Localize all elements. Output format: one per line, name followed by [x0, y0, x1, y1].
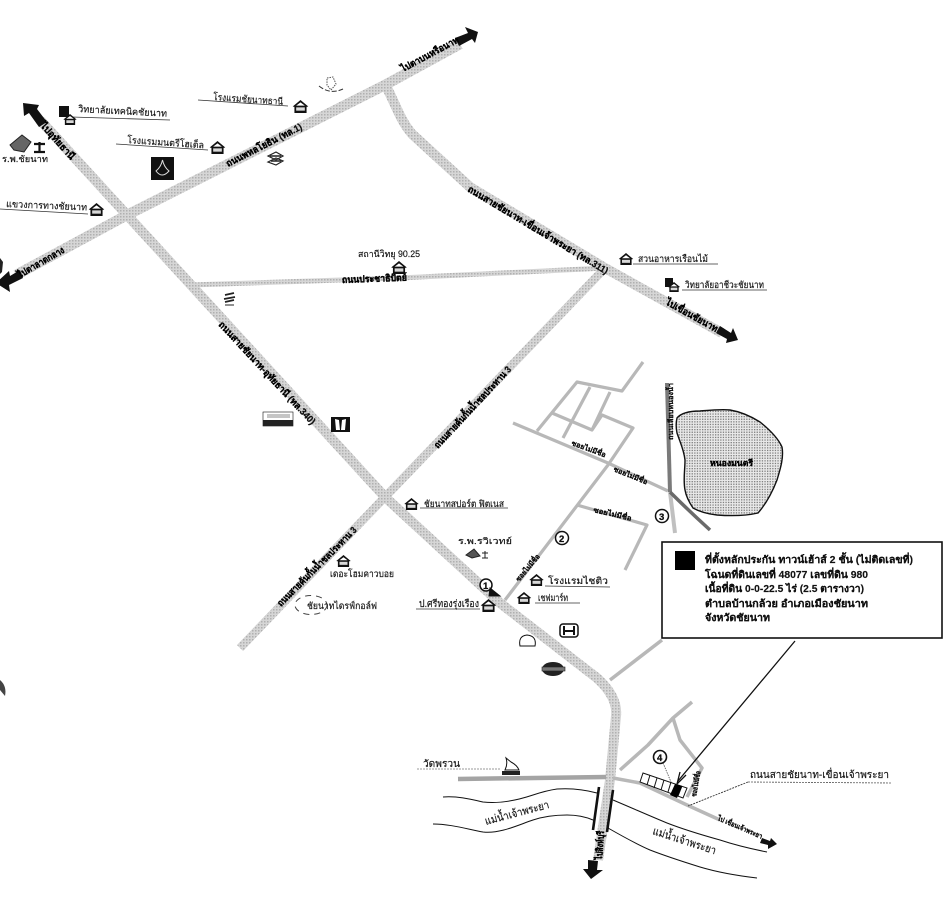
- marker 3: [656, 510, 668, 523]
- label: Ban Phot: ไปตาบนหรือนาท: [398, 34, 461, 75]
- label: lake road: ถนนเลียบหนองน้ำ: [664, 383, 675, 440]
- road: lakeside: [667, 383, 670, 492]
- river bank north: [443, 789, 767, 852]
- site marker: [670, 784, 682, 798]
- river: [433, 787, 767, 878]
- arrow: S: [583, 860, 603, 879]
- landmark: hotel: [116, 133, 225, 154]
- logo: hotel: [151, 157, 174, 180]
- road: highway 1: [16, 44, 460, 275]
- label: lane 2: ซอยไม่มีชื่อ: [612, 464, 649, 486]
- label: south: ไปสิงห์บุรี: [593, 830, 607, 861]
- pond: [676, 410, 783, 516]
- legend square: [675, 551, 695, 570]
- landmark: The Home Cowboy: [330, 555, 394, 580]
- edge mark: [0, 680, 5, 696]
- landmark: Wat Phrawan: [417, 758, 520, 775]
- label: lane 1: ซอยไม่มีชื่อ: [570, 437, 608, 459]
- landmark: Rawiwet hospital: [458, 536, 512, 558]
- logo: Suzuki: [224, 293, 235, 305]
- landmark: technical college: วิทยาลัยเทคนิคชัยนาท: [77, 104, 167, 120]
- logo: Honda: [560, 624, 578, 637]
- callout box: [662, 542, 942, 638]
- marker 1: 1: [483, 581, 489, 592]
- label: 340: ถนนสายชัยนาท-อุทัยธานี (ทล.340): [216, 319, 318, 427]
- label: Phahon Yothin: ถนนพหลโยธิน (ทล.1): [224, 121, 304, 170]
- landmark: technical college: [59, 104, 170, 125]
- label: Irrigation 3 upper: ถนนสายคันกั้นน้ำชลประทาน 3: [430, 363, 514, 451]
- label: 311: ถนนสายชัยนาท-เขื่อนเจ้าพระยา (ทล.311): [465, 182, 612, 277]
- callout text: จังหวัดชัยนาท: [705, 612, 770, 624]
- callout line: river road label: [688, 767, 892, 806]
- label: Uthai: ไปอุทัยธานี: [37, 119, 78, 163]
- label: Irrigation 3 lower: ถนนสายคันกั้นน้ำชลประทาน 3: [273, 523, 359, 609]
- landmark: chef mart: [517, 592, 580, 604]
- road: 311 Chainat-Chao Phraya dam: [386, 86, 722, 333]
- landmark: Chainat Thani hotel: [198, 91, 308, 113]
- landmark: vocational college: วิทยาลัยอาชีวะชัยนาท: [684, 279, 764, 291]
- landmark: restaurant: สวนอาหารเรือนไม้: [638, 253, 708, 265]
- marker 1: [480, 579, 500, 596]
- callout text: โฉนดที่ดินเลขที่ 48077 เลขที่ดิน 980: [704, 567, 868, 581]
- landmark: Wat Phrawan: วัดพรวน: [423, 759, 460, 770]
- road: Chaloem Phrakiat: [240, 268, 605, 648]
- local lanes: [505, 362, 668, 600]
- landmark: radio station: สถานีวิทยุ 90.25: [358, 249, 420, 260]
- callout text: เนื้อที่ดิน 0-0-22.5 ไร่ (2.5 ตารางวา): [705, 581, 864, 595]
- landmark: radio station: [358, 249, 420, 274]
- label: Ban Phot 2: ไปเขื่อนชัยนาท: [663, 294, 721, 335]
- landmark: chef mart: เชฟมาร์ท: [538, 592, 568, 604]
- leader arrow: [677, 641, 795, 784]
- logo: Lotus: [263, 412, 293, 426]
- landmark: sport fitness: ชัยนาทสปอร์ต ฟิตเนส: [424, 498, 504, 510]
- callout line: river road label: ถนนสายชัยนาท-เขื่อนเจ้าพระยา: [750, 767, 889, 781]
- callout text: ตำบลบ้านกล้วย อำเภอเมืองชัยนาท: [705, 598, 868, 610]
- numbered marker 4: [654, 750, 671, 782]
- river label west: แม่น้ำเจ้าพระยา: [483, 796, 551, 828]
- landmark: golf: [295, 596, 377, 614]
- arrow: far east: [760, 838, 777, 849]
- bridge: [593, 787, 613, 832]
- logo: Isuzu: [331, 417, 350, 432]
- marker 3: 3: [659, 512, 664, 523]
- label: Tak: ไปตาลาดกลาง: [15, 244, 67, 281]
- landmark: The Home Cowboy: เดอะโฮมคาวบอย: [330, 568, 394, 580]
- river label east: แม่น้ำเจ้าพระยา: [651, 823, 718, 857]
- road labels: [15, 34, 764, 861]
- river bank south: [433, 815, 757, 878]
- road: Prachathipat: [190, 268, 605, 285]
- pond label: หนองมนตรี: [710, 458, 753, 468]
- road: lane to river road: [610, 640, 702, 797]
- logo: Shell: [520, 635, 535, 646]
- marker 2: 2: [559, 534, 564, 545]
- arrow: E: [716, 326, 738, 343]
- arrow: NE: [455, 27, 478, 46]
- label: lane 5: ซอยไม่มีชื่อ: [688, 770, 702, 797]
- marker 2: [556, 532, 568, 545]
- landmark: Highways office: แขวงการทางชัยนาท: [6, 199, 87, 214]
- logo: Nissan: [542, 662, 565, 676]
- logo: bank: [268, 152, 283, 165]
- road: Wat Phrawan lane: [458, 777, 606, 779]
- logo: temple mark: [319, 77, 343, 91]
- label: lane 4: ซอยไม่มีชื่อ: [513, 552, 542, 583]
- landmark: ice factory: [529, 574, 610, 587]
- landmark: hospital: [2, 135, 48, 164]
- landmark: Sri Thong: [416, 598, 496, 612]
- landmark: golf: ชัยนาทไดรฟ์กอล์ฟ: [307, 600, 377, 612]
- road: river road east: [613, 778, 720, 820]
- label: lane 3: ซอยไม่มีชื่อ: [593, 504, 633, 523]
- callout text: ที่ตั้งหลักประกัน ทาวน์เฮ้าส์ 2 ชั้น (ไม่ติดเลขที่): [705, 552, 913, 566]
- arrow: NW: [23, 103, 47, 127]
- callout text: [704, 552, 913, 624]
- landmark: Chainat Thani hotel: โรงแรมชัยนาทธานี: [213, 91, 284, 108]
- site lots: [640, 773, 687, 798]
- landmark: ice factory: โรงแรมไชติว: [548, 575, 608, 587]
- label: Prachathipat: ถนนประชาธิปัตย์: [342, 272, 407, 286]
- landmark: Rawiwet hospital: ร.พ.รวิเวทย์: [458, 536, 512, 546]
- numbered marker 4: 4: [657, 753, 663, 764]
- arrow: SW: [0, 270, 23, 292]
- road: Chainat-Uthai Thani 340: [40, 120, 616, 860]
- label: east small: ไป เขื่อนเจ้าพระยา: [715, 812, 764, 841]
- road network: [16, 44, 722, 860]
- landmark: hotel: โรงแรมมนตรีโฮเต็ล: [127, 133, 205, 151]
- landmark: Sri Thong: ป.ศรีทองรุ่งเรือง: [419, 598, 479, 610]
- landmark: hospital: ร.พ.ชัยนาท: [2, 154, 48, 164]
- landmark: vocational college: [665, 278, 767, 292]
- edge mark top-left: [0, 258, 3, 274]
